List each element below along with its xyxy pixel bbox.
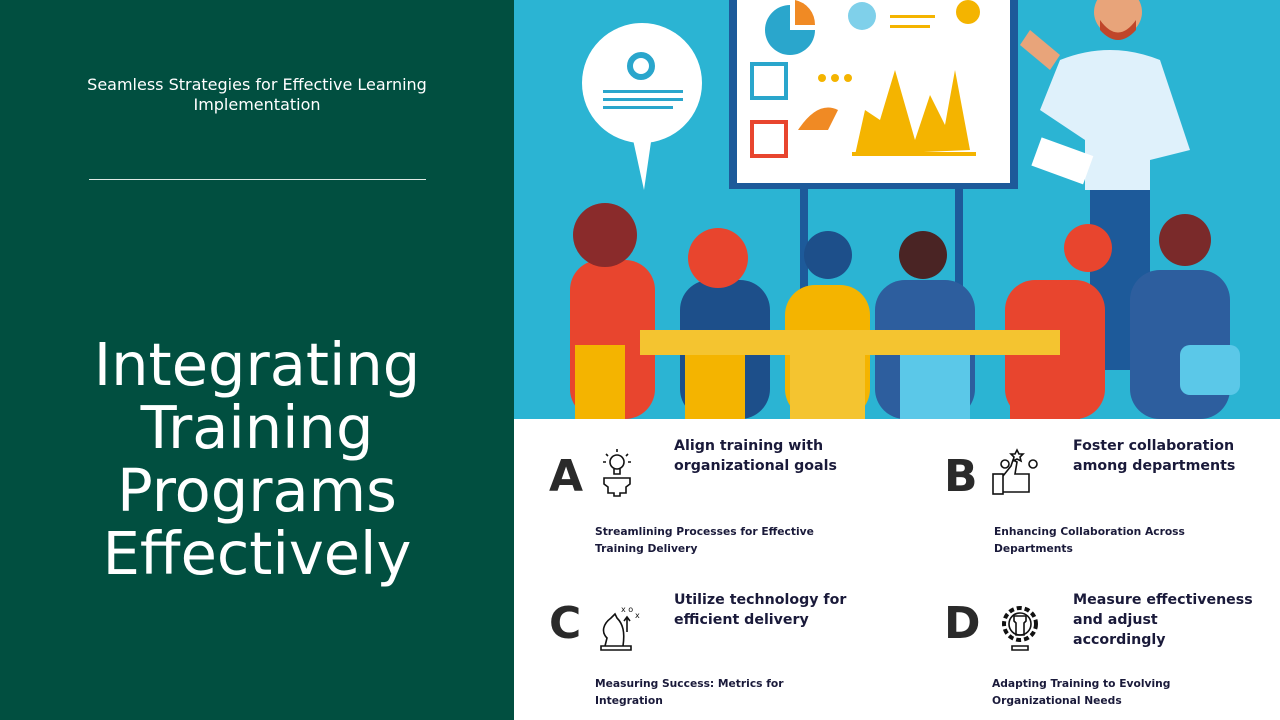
heading D: Measure effectiveness and adjust accordingly bbox=[1073, 592, 1253, 648]
whiteboard bbox=[729, 0, 1018, 330]
icon: chess knight strategy: x bbox=[635, 611, 640, 620]
heading C: Utilize technology for efficient delivery bbox=[674, 592, 846, 628]
item B: B bbox=[944, 451, 978, 502]
item A: A bbox=[549, 451, 583, 502]
item C bbox=[549, 592, 846, 707]
illustration: trainer presenting to audience bbox=[514, 0, 1280, 419]
item B bbox=[944, 438, 1235, 555]
panel: left title panel bbox=[0, 0, 514, 720]
title: Integrating Training Programs Effectively bbox=[94, 330, 420, 588]
trainer bbox=[1020, 0, 1190, 370]
subtitle: Seamless Strategies for Effective Learning Implementation bbox=[87, 75, 427, 114]
desc B: Enhancing Collaboration Across Departments bbox=[994, 525, 1185, 555]
heading A: Align training with organizational goals bbox=[674, 438, 837, 474]
icon: gear chess rook bbox=[1002, 606, 1038, 651]
item A bbox=[549, 438, 837, 555]
speech bubble bbox=[582, 23, 702, 190]
desc D: Adapting Training to Evolving Organizational Needs bbox=[992, 677, 1170, 707]
icon: chess knight strategy bbox=[600, 605, 640, 651]
icon: chess knight strategy: x o bbox=[621, 605, 633, 614]
desc A: Streamlining Processes for Effective Training Delivery bbox=[595, 525, 814, 555]
item D: D bbox=[944, 598, 981, 649]
icon: thumbs up stars bbox=[992, 448, 1038, 495]
item C: C bbox=[549, 598, 581, 649]
item D bbox=[944, 592, 1253, 707]
heading B: Foster collaboration among departments bbox=[1073, 438, 1235, 474]
audience bbox=[570, 203, 1240, 419]
icon: lightbulb gear bbox=[603, 449, 631, 497]
desc C: Measuring Success: Metrics for Integration bbox=[595, 677, 784, 707]
